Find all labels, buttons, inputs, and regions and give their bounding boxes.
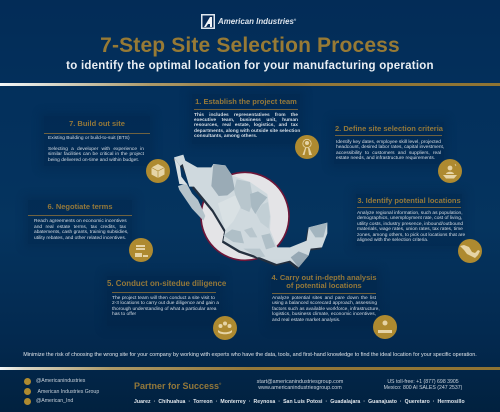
logo mark — [201, 14, 215, 29]
step 4 text: Analyze potential sites and pare down the list — [272, 296, 376, 301]
step 5 text: has to offer — [112, 312, 136, 317]
icon: step 5 location pins — [213, 316, 237, 340]
step 1 text: consultants, among others. — [194, 134, 257, 139]
step 5 text — [112, 296, 219, 317]
step 4 text: and real estate market analysis. — [272, 318, 340, 323]
step 3 text: zones, among others, to pick out locations that are — [357, 233, 465, 238]
step 7 text: Existing Building or build-to-suit (BTS) — [48, 136, 130, 141]
step 4 text: logistics, business climate, economic incentives, — [272, 312, 376, 317]
step 3 text: utility costs, industry presence, inbound/outbound — [357, 222, 463, 227]
step 7 text: Selecting a developer with experience in — [48, 147, 144, 152]
panel: step 1 establish the project team — [192, 94, 300, 144]
step 6 text: Reach agreements on economic incentives — [34, 219, 127, 224]
step 6 text: abatements, cash grants, training subsidies, — [34, 230, 129, 235]
phone numbers: US toll-free: +1 (877) 698 3905 — [387, 379, 459, 385]
step 3 text: Analyze regional information, such as population, — [357, 210, 463, 216]
email and website — [256, 379, 343, 391]
step 7 text — [48, 136, 144, 163]
step 2 text: Identify key dates, employee skill level, projected — [336, 140, 441, 145]
partner for success tagline: Partner for Success® — [134, 381, 221, 391]
step 7 text: being delivered on-time and within budget. — [48, 158, 139, 163]
state: Campeche — [309, 223, 327, 237]
panel: step 3 identify potential locations — [356, 194, 462, 246]
step 5 text: 2-3 locations to carry out due diligence and gain a — [112, 301, 219, 306]
state: Coahuila — [234, 179, 253, 212]
icon: step 1 team — [295, 135, 319, 159]
closing statement: Minimize the risk of choosing the wrong site for your company by working with experts who have the data, tools, and first-hand knowledge to find the ideal location for your specific operation. — [23, 352, 477, 358]
step 5 heading: 5. Conduct on-sitedue diligence — [107, 279, 226, 288]
icon: step 4 hand — [373, 315, 397, 339]
facebook handle: @Americanindustries — [36, 378, 85, 384]
state: Guerrero — [243, 249, 265, 257]
panel: step 4 carry out in-depth analysis — [271, 272, 377, 326]
social links — [24, 378, 99, 405]
step 6 text — [34, 218, 129, 241]
phone numbers — [384, 379, 462, 391]
subtitle: to identify the optimal location for your manufacturing operation — [66, 60, 434, 72]
state: Nuevo Leon — [250, 191, 267, 214]
step 7 text: similar facilities can be critical in the project — [48, 152, 144, 157]
footer rule — [0, 366, 500, 370]
step 4 text — [272, 296, 380, 323]
logo wordmark: American Industries® — [218, 16, 296, 26]
icon: facebook — [24, 378, 31, 384]
step 3 text: demographics, unemployment rate, cost of living, — [357, 216, 462, 221]
step 3 text — [357, 210, 465, 243]
step 1 heading: 1. Establish the project team — [195, 97, 297, 106]
panel: step 6 negotiate terms — [28, 200, 132, 244]
icon: step 6 gavel — [129, 238, 153, 262]
header rule — [0, 82, 500, 86]
step 3 heading: 3. Identify potential locations — [357, 196, 461, 204]
step 1 text: resources, real estate, logistics, and tax — [194, 123, 298, 128]
state: Chiapas — [291, 251, 309, 267]
step 1 text: executive team, business unit, human — [194, 118, 298, 123]
northern Baja strip — [174, 157, 187, 185]
state: Puebla — [261, 233, 275, 249]
state: Jalisco — [223, 229, 244, 243]
step 2 text — [336, 140, 444, 161]
panel: step 7 build out site — [44, 116, 150, 166]
step 4 text: factors such as available workforce, infrastructure, — [272, 307, 380, 312]
circle behind map — [201, 172, 289, 260]
step 1 text: This includes representatives from the — [194, 112, 298, 118]
mainland — [174, 155, 327, 267]
email and website: start@americanindustriesgroup.com — [257, 379, 343, 385]
step 3 text: aligned with the selection criteria. — [357, 238, 428, 243]
step 2 text: estate needs, and infrastructure requirements. — [336, 156, 435, 161]
panel: step 5 conduct on-site due diligence — [107, 276, 220, 326]
icon: linkedin — [24, 388, 31, 395]
step 4 heading: 4. Carry out in-depth analysis — [271, 272, 377, 282]
state: central — [244, 227, 257, 237]
state: Chihuahua — [211, 165, 235, 196]
baja california — [178, 183, 205, 221]
step 6 text: and real estate terms, tax credits, tax — [34, 225, 126, 230]
step 2 text: headcount, desired labor rates, capital investment, — [336, 145, 444, 150]
step 6 heading: 6. Negotiate terms — [47, 202, 113, 211]
step 5 text: The project team will then conduct a site visit to — [112, 296, 215, 301]
step 4 heading: of potential locations — [286, 280, 362, 290]
step 3 text: materials, wage rates, union rates, tax rates, time — [357, 227, 463, 232]
email and website: www.americanindustriesgroup.com — [258, 385, 342, 391]
state: Zacatecas / Durango — [218, 195, 241, 230]
step 2 heading: 2. Define site selection criteria — [335, 124, 443, 132]
map of Mexico with circle — [173, 154, 328, 270]
step 4 text: using a balanced scorecard approach, assessing — [272, 301, 377, 306]
linkedin name: American Industries Group — [38, 388, 99, 394]
step 5 text: thorough understanding of what a particular area — [112, 307, 216, 312]
header logo — [201, 14, 296, 29]
icon: step 3 map — [458, 239, 482, 263]
cities list: Juarez · Chihuahua · Torreon · Monterrey · Reynosa · San Luis Potosi · Guadalajara · Guanajuato · Queretaro · Hermosillo — [134, 398, 465, 404]
step 4 heading — [271, 272, 377, 290]
icon: twitter — [24, 398, 31, 404]
phone numbers: Mexico: 800 AI SALES (247 2537) — [384, 385, 462, 391]
step 1 text — [194, 112, 300, 139]
map shadow — [173, 157, 326, 269]
icon: step 7 box — [146, 159, 170, 183]
state: Tamaulipas — [256, 202, 270, 229]
panel: step 2 define site selection criteria — [334, 122, 444, 164]
step 7 heading: 7. Build out site — [69, 119, 125, 128]
twitter handle: @American_Ind — [36, 398, 73, 404]
step 6 text: utility rebates, and other related incentives. — [34, 236, 126, 241]
step 1 text: departments, along with outside site selection — [194, 129, 300, 134]
title: 7-Step Site Selection Process — [100, 34, 400, 57]
icon: step 2 person at desk — [438, 159, 462, 183]
step 2 text: accessibility to customers and suppliers, real — [336, 151, 441, 156]
